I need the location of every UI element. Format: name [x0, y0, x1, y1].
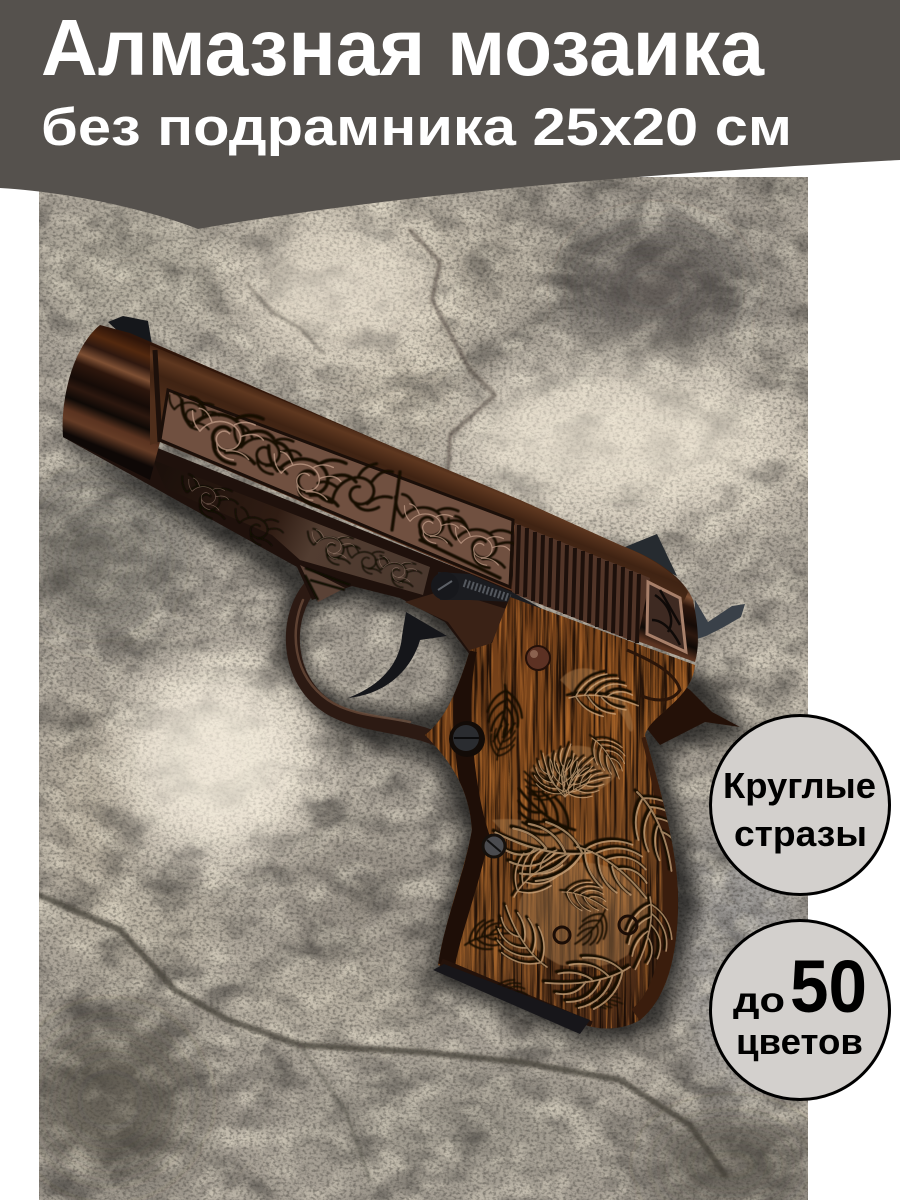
grip screws	[449, 646, 550, 857]
photo: stone background	[30, 177, 820, 1200]
front sight	[108, 316, 152, 345]
badge: up to 50 colours: 50	[790, 945, 867, 1028]
hammer	[694, 600, 745, 640]
slide serrations	[512, 523, 650, 643]
slide	[63, 325, 698, 662]
frame	[63, 437, 515, 655]
wooden grip	[420, 590, 704, 1040]
slide stop lever	[431, 572, 548, 612]
grip dark rim	[638, 735, 674, 1018]
grip carved highlight masses	[492, 668, 650, 967]
subtitle: без подрамника 25х20 см	[41, 98, 792, 157]
stone tonal areas	[30, 200, 820, 1200]
badge: up to 50 colours: до	[733, 981, 785, 1020]
badge: up to 50 colours	[710, 920, 890, 1100]
badge: round rhinestones: Круглые	[723, 765, 876, 806]
lower engraved panel	[222, 492, 430, 595]
rear sight	[620, 534, 677, 576]
trigger guard	[286, 583, 435, 746]
grip carving: leaves	[464, 669, 672, 1010]
rock cracks	[39, 230, 725, 1180]
grip upper contour	[627, 650, 680, 700]
magazine base	[433, 964, 590, 1034]
stone highlight and shade overlay	[40, 230, 800, 1200]
engraved slide panel	[160, 390, 513, 587]
grip scroll circles	[554, 916, 637, 943]
badge: round rhinestones	[710, 716, 890, 894]
trigger	[348, 612, 447, 698]
header banner	[0, 0, 900, 229]
pistol shadow	[60, 440, 750, 1045]
pistol	[63, 316, 745, 1040]
badge: round rhinestones: стразы	[734, 813, 867, 854]
badge: up to 50 colours: цветов	[736, 1021, 863, 1062]
grip tang	[648, 688, 740, 745]
stone texture	[39, 177, 808, 1200]
title: Алмазная мозаика	[41, 3, 764, 92]
rear engraved panel	[647, 582, 686, 652]
